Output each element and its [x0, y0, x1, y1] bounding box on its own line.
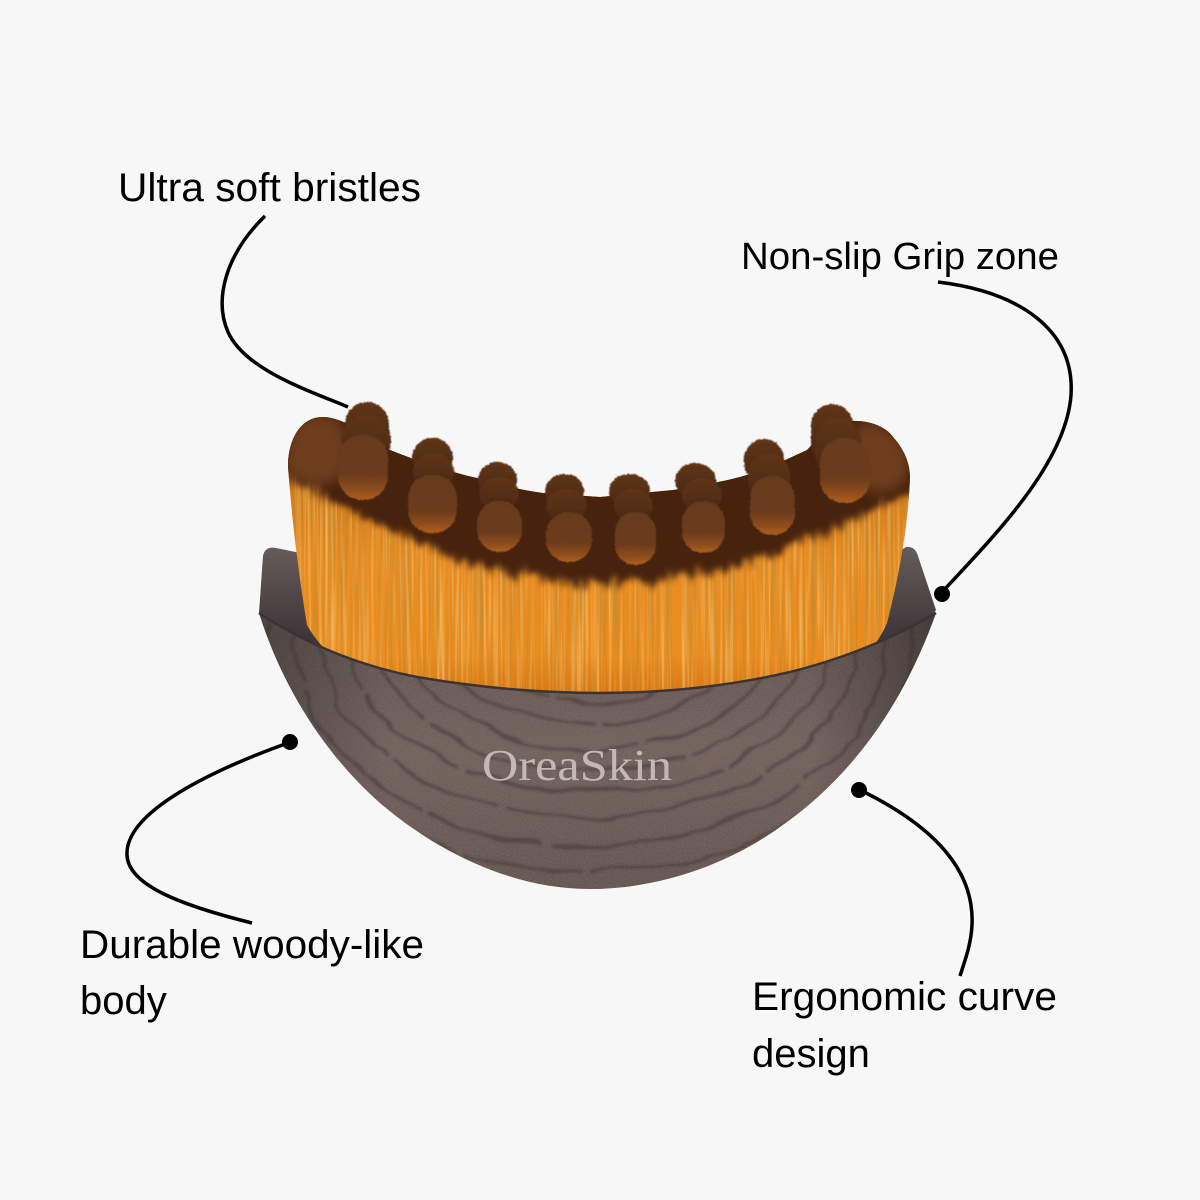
label: durable woody-like body	[80, 923, 424, 1023]
tuft column 4	[545, 474, 592, 562]
tuft column 1	[338, 402, 391, 500]
bristles	[288, 417, 910, 692]
tuft column 5	[609, 474, 656, 565]
label: durable woody-like body: Durable woody-like	[80, 923, 424, 967]
massage tufts	[338, 402, 870, 565]
brand name: OreaSkin	[482, 741, 672, 790]
tuft column 2	[408, 438, 457, 533]
tuft column 8	[811, 404, 870, 503]
label: non-slip grip zone: Non-slip Grip zone	[741, 236, 1059, 278]
tuft column 7	[744, 439, 795, 535]
label: durable woody-like body: body	[80, 979, 167, 1023]
arrow: body leader	[127, 734, 298, 923]
label: ergonomic curve design: design	[752, 1032, 870, 1076]
label: ergonomic curve design: Ergonomic curve	[752, 975, 1057, 1019]
arrow: bristles leader	[222, 216, 348, 407]
brush product	[258, 401, 937, 889]
tuft column 3	[477, 462, 522, 552]
wooden handle bowl	[258, 612, 937, 889]
tuft column 6	[675, 463, 725, 553]
arrow: curve leader	[851, 782, 972, 976]
label: ergonomic curve design	[752, 975, 1057, 1076]
arrow: grip zone leader	[934, 282, 1071, 602]
handle back wall with raised tips	[259, 547, 936, 665]
label: ultra soft bristles: Ultra soft bristles	[118, 166, 421, 210]
